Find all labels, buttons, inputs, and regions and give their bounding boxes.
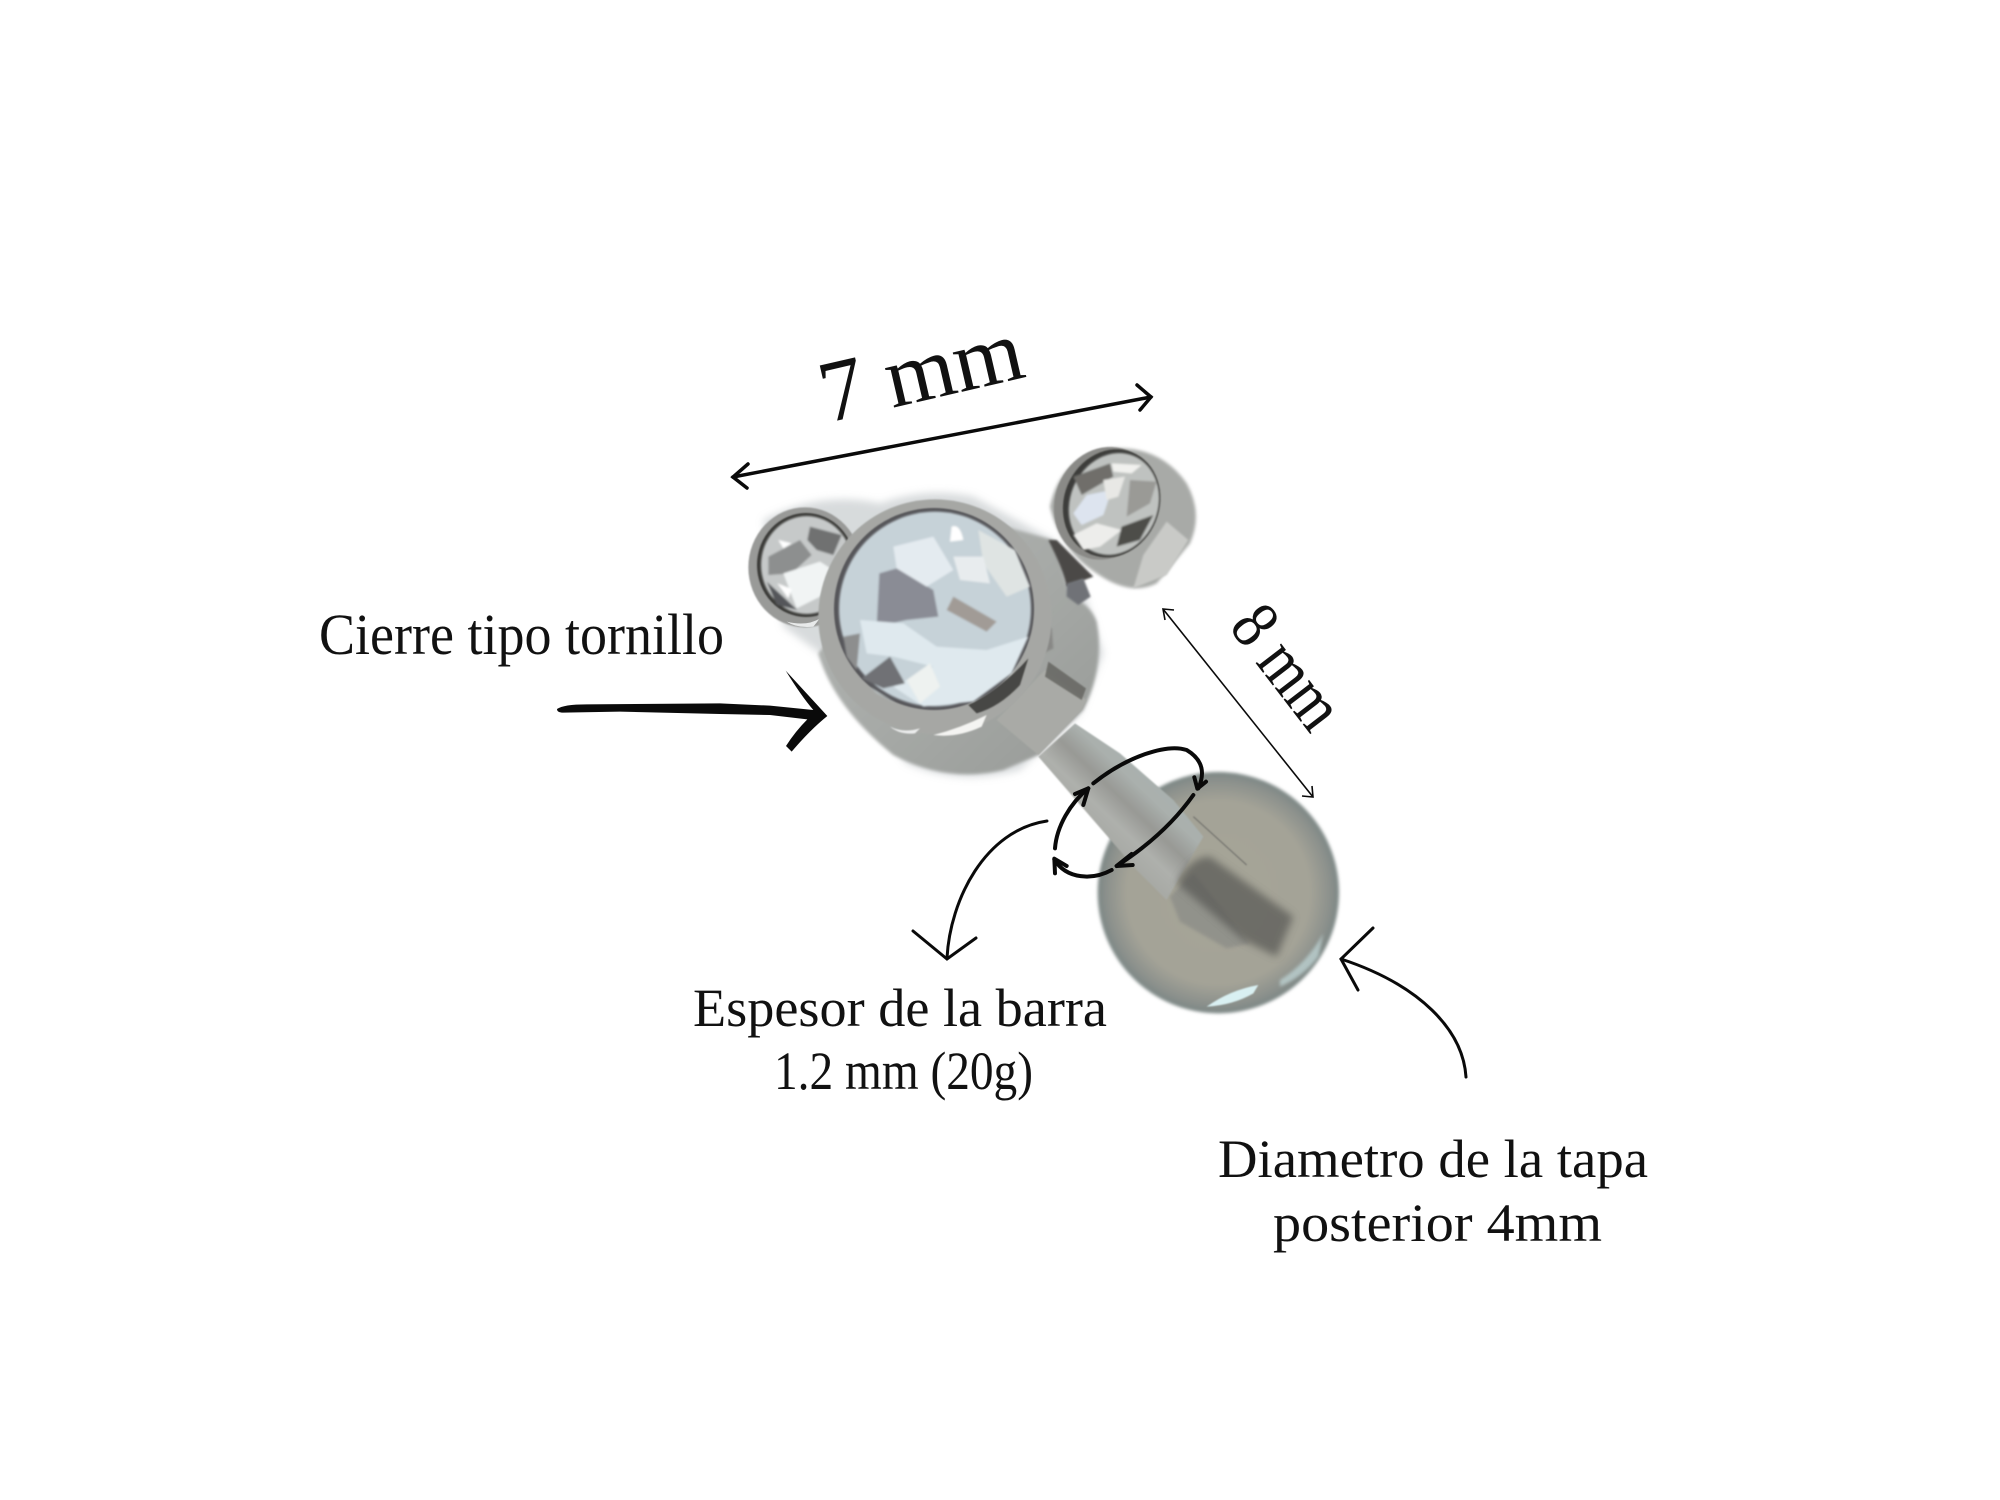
photo: titanium labret piercing with three crystals <box>748 431 1339 1013</box>
ball rim highlight <box>1207 985 1258 1007</box>
back ball and bar <box>1038 723 1339 1013</box>
label: 7 mm: 7 mm <box>810 302 1032 442</box>
label: bar gauge: 1.2 mm (20g) <box>774 1041 1033 1101</box>
label: closure type: Cierre tipo tornillo <box>319 602 724 667</box>
back ball <box>1098 772 1339 1013</box>
soft back plate shadow <box>763 493 1103 777</box>
arrow: bar thickness callout <box>913 821 1047 959</box>
arrow: back cap callout <box>1341 928 1466 1077</box>
left crystal facets <box>761 516 852 614</box>
label: cap diameter: Diametro de la tapa <box>1218 1129 1648 1189</box>
arrow: 7 mm width <box>733 385 1151 488</box>
collar <box>997 670 1087 755</box>
crystals and main body <box>748 431 1196 777</box>
main crystal facets <box>839 512 1031 707</box>
arrows: bar circumference <box>1054 748 1206 877</box>
main bezel and crystal <box>818 499 1052 736</box>
label: bar thickness: Espesor de la barra <box>693 978 1107 1038</box>
bar shadow streak <box>1170 873 1250 948</box>
arrow: brush arrow to closure <box>557 671 827 752</box>
left small crystal <box>748 507 862 627</box>
notch <box>1048 540 1093 587</box>
main body cylinder <box>818 507 1099 774</box>
bar <box>1038 723 1203 900</box>
right small crystal <box>1037 431 1196 588</box>
label: 8 mm: 8 mm <box>1215 590 1359 745</box>
arrow: 8 mm length <box>1163 609 1313 797</box>
right crystal facets <box>1054 439 1174 569</box>
label: cap diameter value: posterior 4mm <box>1273 1193 1602 1253</box>
